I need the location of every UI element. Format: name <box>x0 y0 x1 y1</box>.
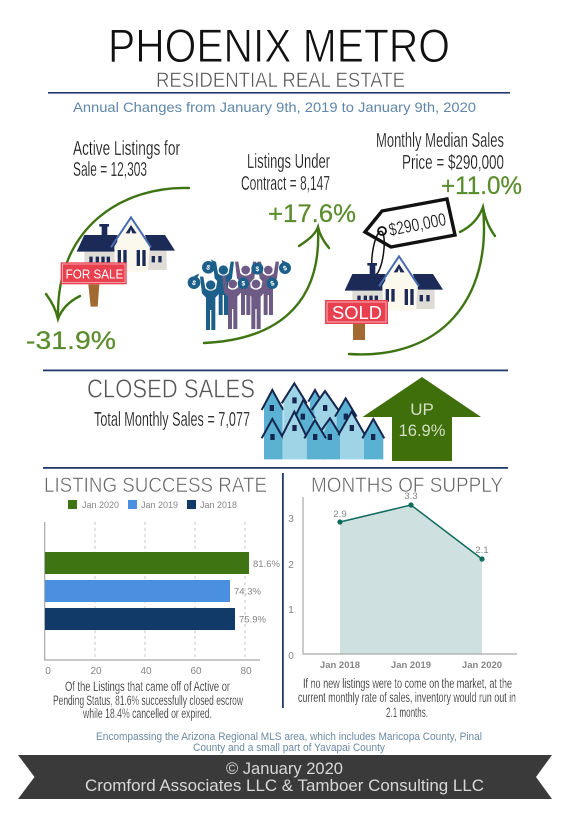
caption: listing success rate: Of the Listings that came off of Active or <box>65 679 230 694</box>
icon: cluster of houses <box>262 383 384 459</box>
active listings label: Sale = 12,303 <box>73 159 147 181</box>
stat: active listings change: -31.9% <box>26 327 116 355</box>
area chart: 0 <box>288 651 294 662</box>
icon: group of people with money bags: $ <box>270 280 276 288</box>
legend: Jan 2019 <box>141 500 178 511</box>
icon: group of people with money bags: $ <box>205 264 211 272</box>
legend: Jan 2018 <box>200 500 237 511</box>
area chart: 1 <box>288 605 294 616</box>
median sales price label <box>376 130 504 174</box>
panel: months of supply <box>288 473 517 720</box>
listings under contract label: Listings Under <box>247 151 330 173</box>
arrow: active listings down <box>46 188 189 319</box>
caption: months of supply <box>298 676 516 720</box>
arrow: closed sales up 16.9% <box>362 377 481 461</box>
bar chart: 80 <box>240 666 252 677</box>
bar chart: 75.9% <box>239 614 266 626</box>
icon: price tag <box>365 199 455 276</box>
caption: listing success rate: Pending Status, 81.6% successfully closed escrow <box>53 693 243 708</box>
area chart <box>288 491 517 671</box>
bar chart: 74.3% <box>234 586 261 598</box>
icon: house for sale <box>61 217 175 307</box>
icon: group of people with money bags: $ <box>191 280 197 287</box>
area chart: 2.9 <box>333 509 347 520</box>
legend <box>68 500 237 511</box>
footer banner <box>18 755 552 799</box>
icon: group of people with money bags <box>188 259 291 330</box>
icon: group of people with money bags: $ <box>255 266 259 273</box>
icon: sold house <box>325 256 443 340</box>
active listings label: Active Listings for <box>73 138 180 160</box>
legend: Jan 2020 <box>82 500 119 511</box>
stat: listings under contract change: +17.6% <box>268 200 356 228</box>
area chart: 3.3 <box>404 491 418 502</box>
listings under contract label <box>241 151 330 195</box>
icon: group of people with money bags: $ <box>241 281 245 288</box>
footer banner: © January 2020 <box>226 759 343 778</box>
median sales price label: Monthly Median Sales <box>376 130 504 152</box>
footer banner: Cromford Associates LLC & Tamboer Consulting LLC <box>85 776 484 795</box>
bar chart: 40 <box>140 666 152 677</box>
icon: group of people with money bags: $ <box>282 265 288 273</box>
arrow: listings under contract up <box>204 227 329 343</box>
bar chart <box>45 522 280 677</box>
area chart: 2 <box>288 560 294 571</box>
bar chart: 20 <box>90 666 102 677</box>
bar chart: 81.6% <box>253 559 280 570</box>
icon: house for sale: FOR SALE <box>66 266 123 281</box>
listings under contract label: Contract = 8,147 <box>241 173 330 195</box>
bar chart: 0 <box>45 666 51 677</box>
coverage area note <box>96 731 482 754</box>
caption: listing success rate: while 18.4% cancelled or expired. <box>82 706 212 721</box>
closed sales heading: CLOSED SALES <box>87 374 255 404</box>
heading: months of supply: MONTHS OF SUPPLY <box>311 473 503 497</box>
area chart: Jan 2019 <box>391 660 431 671</box>
caption: listing success rate <box>53 679 243 721</box>
title: PHOENIX METRO <box>108 19 450 72</box>
heading: listing success rate: LISTING SUCCESS RATE <box>44 473 267 497</box>
arrow: median price up <box>349 207 495 354</box>
panel: listing success rate <box>44 473 280 721</box>
coverage area note: Encompassing the Arizona Regional MLS area, which includes Maricopa County, Pinal <box>96 731 482 743</box>
bar chart: 60 <box>190 666 202 677</box>
median sales price label: Price = $290,000 <box>402 152 504 174</box>
subtitle: RESIDENTIAL REAL ESTATE <box>156 69 405 92</box>
area chart: 2.1 <box>475 545 489 556</box>
stat: median price change: +11.0% <box>441 172 522 200</box>
arrow: closed sales up 16.9%: UP <box>410 400 434 419</box>
caption: months of supply: 2.1 months. <box>386 705 428 720</box>
closed sales total: Total Monthly Sales = 7,077 <box>94 409 250 431</box>
arrow: closed sales up 16.9%: 16.9% <box>399 422 446 440</box>
date range heading: Annual Changes from January 9th, 2019 to January 9th, 2020 <box>73 99 476 115</box>
area chart: Jan 2020 <box>462 660 502 671</box>
icon: sold house: SOLD <box>332 303 382 323</box>
coverage area note: County and a small part of Yavapai County <box>193 742 385 754</box>
area chart: Jan 2018 <box>320 660 360 671</box>
area chart: 3 <box>288 514 294 525</box>
icon: price tag: $290,000 <box>387 209 448 240</box>
active listings label <box>73 138 180 181</box>
